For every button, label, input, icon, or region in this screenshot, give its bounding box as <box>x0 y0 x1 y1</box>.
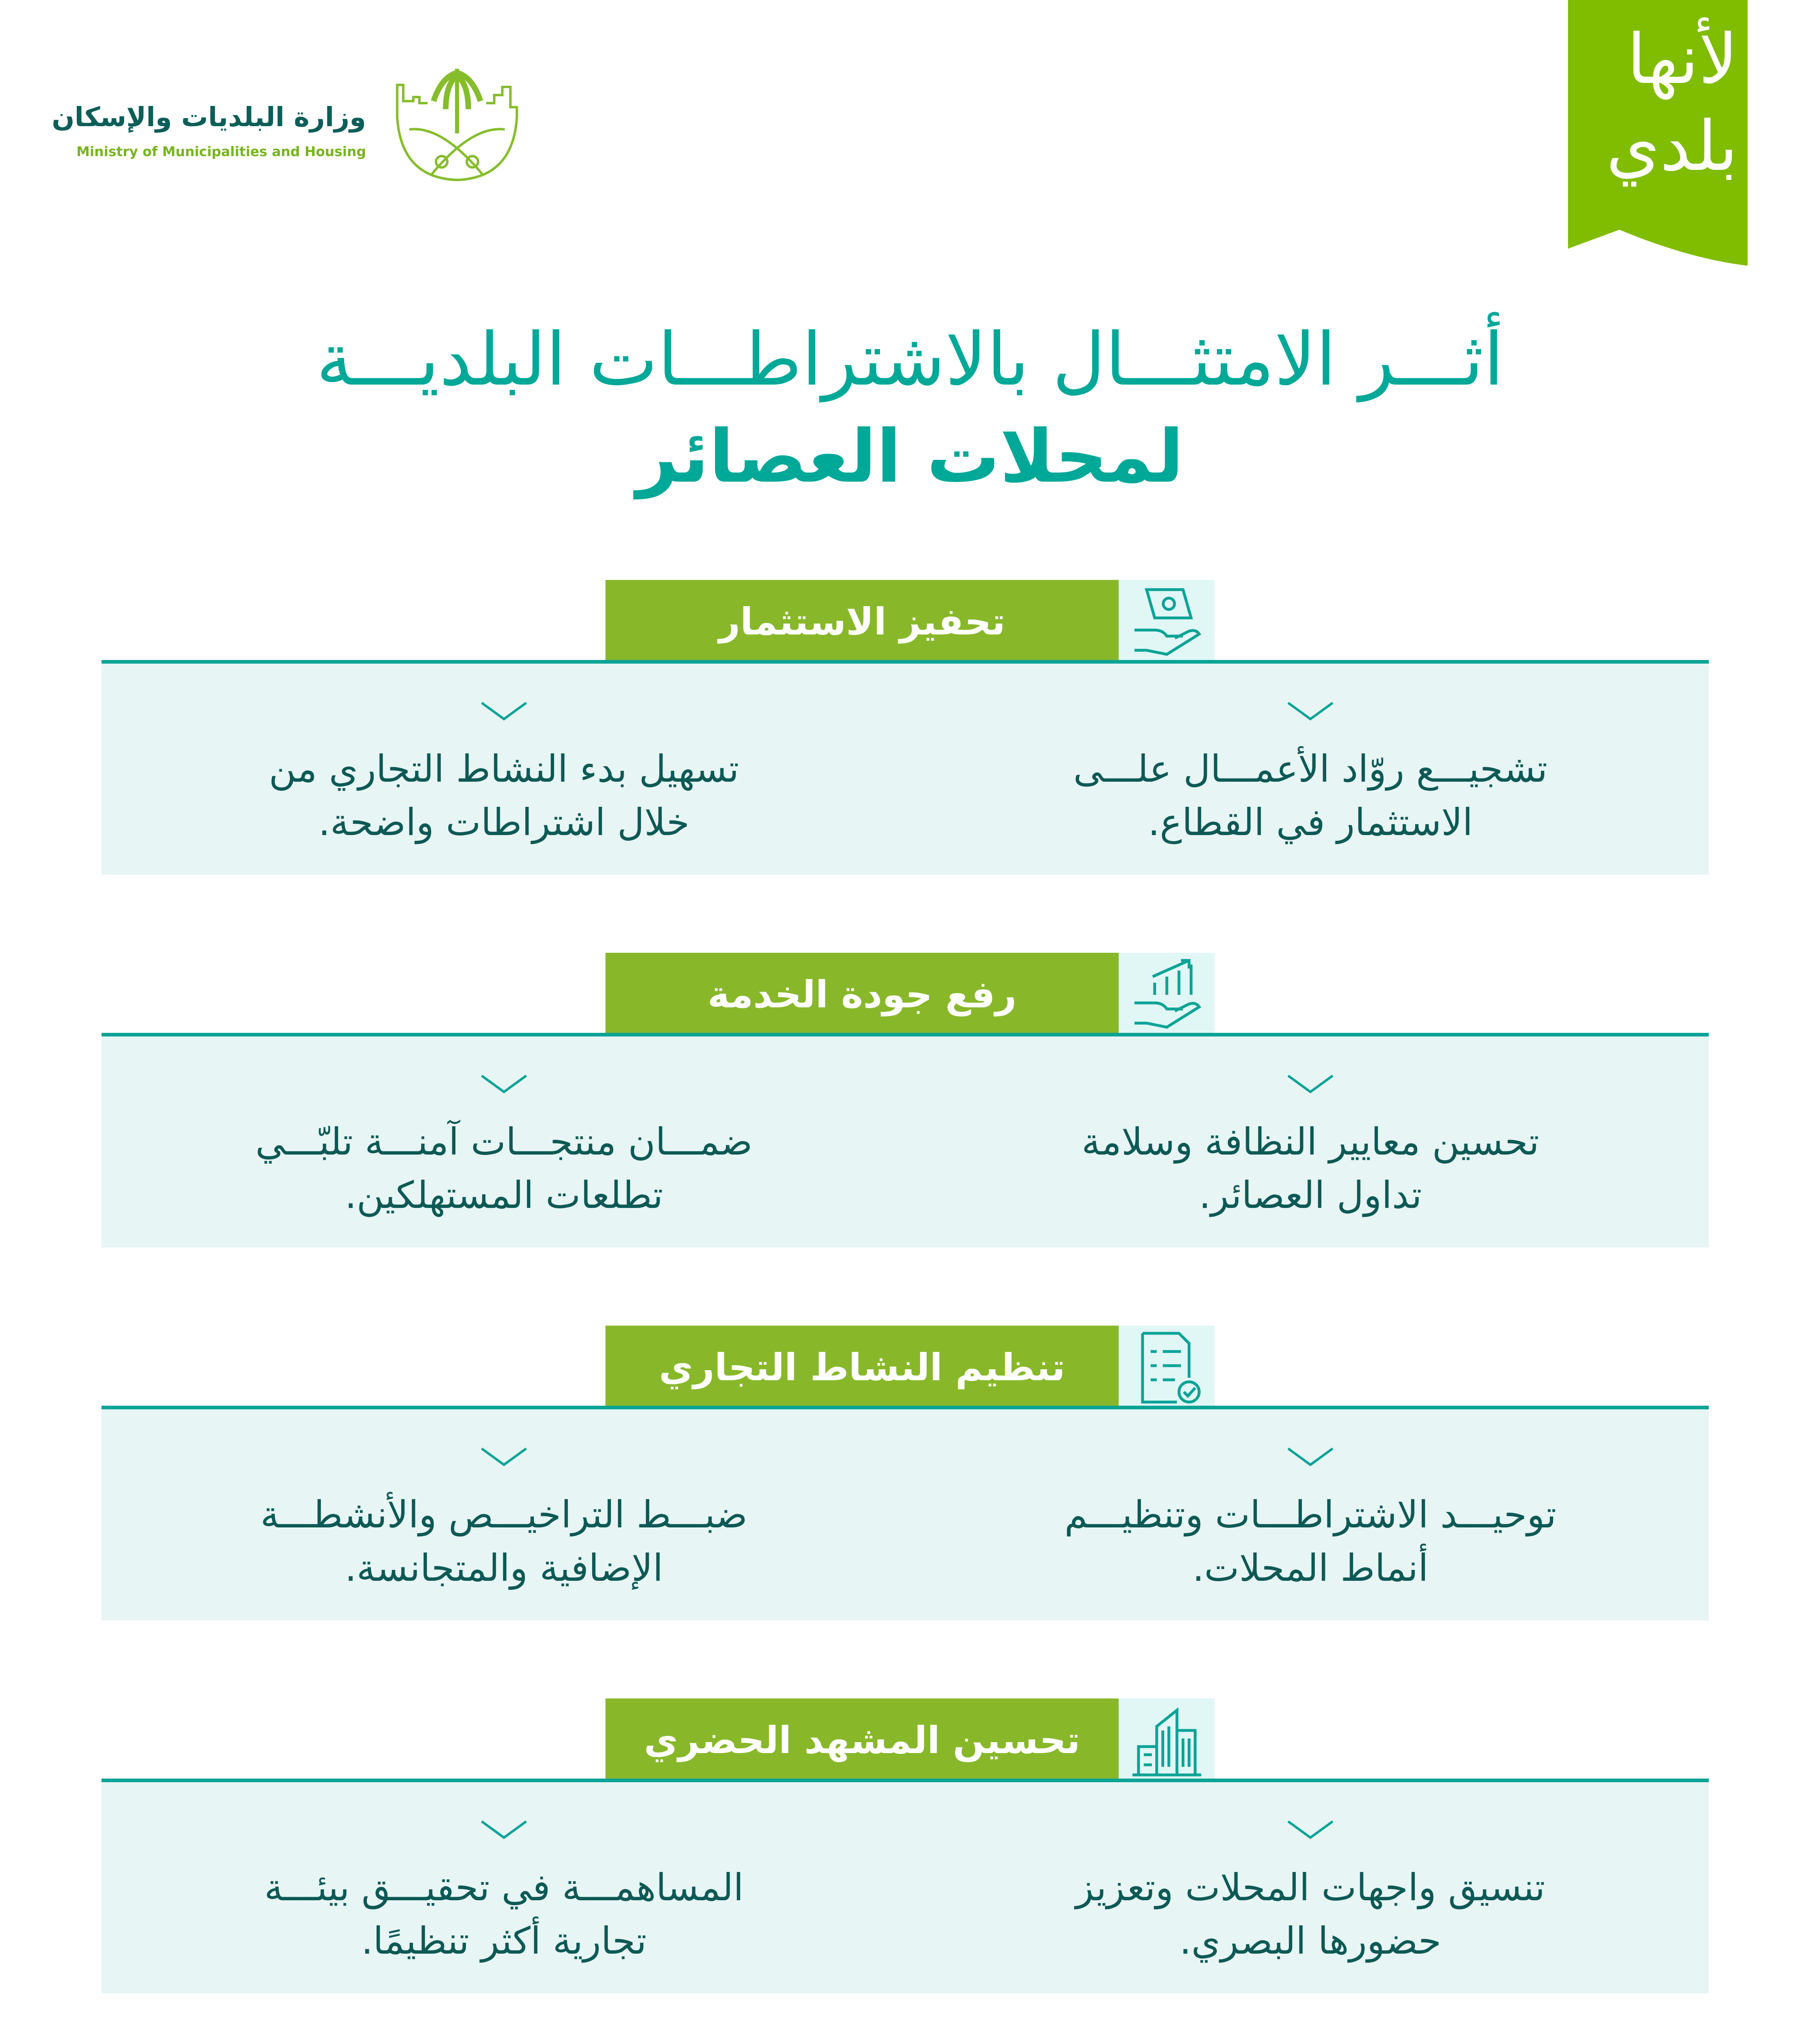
content box <box>102 1779 1709 1993</box>
ribbon: brand tag: بلدي <box>1606 106 1738 186</box>
title: أثـــر الامتثـــال بالاشتراطـــات البلديـــة <box>316 317 1504 402</box>
content box <box>102 1033 1709 1248</box>
ribbon: brand tag <box>1568 0 1748 267</box>
item: left: تسهيل بدء النشاط التجاري من <box>269 747 739 791</box>
section heading: تنظيم النشاط التجاري <box>659 1346 1065 1389</box>
item: left: ضبـــط التراخيـــص والأنشطـــة <box>260 1493 747 1536</box>
section heading <box>605 580 1119 664</box>
content box <box>102 660 1709 875</box>
section heading <box>605 1326 1119 1409</box>
panel: section 4 (urban landscape) <box>102 1677 1709 1996</box>
item: left <box>140 1036 868 1239</box>
section heading: رفع جودة الخدمة <box>708 973 1016 1016</box>
item: right <box>946 1409 1674 1612</box>
title: لمحلات العصائر <box>636 415 1184 499</box>
item: left <box>140 664 868 866</box>
item: right <box>946 1782 1674 1984</box>
ribbon: brand tag: لأنها <box>1627 19 1738 99</box>
section heading <box>605 1698 1119 1782</box>
icon: checklist <box>1119 1326 1215 1409</box>
item: left: تجارية أكثر تنظيمًا. <box>361 1919 647 1963</box>
section heading: تحفيز الاستثمار <box>719 600 1005 643</box>
icon: money hand <box>1119 580 1215 664</box>
panel: section 2 (service quality) <box>102 931 1709 1250</box>
panel: section 1 (investment) <box>102 558 1709 878</box>
logo: ministry name <box>71 99 366 168</box>
item: left: الإضافية والمتجانسة. <box>345 1546 663 1590</box>
icon: growth hand <box>1119 953 1215 1036</box>
icon: ministry emblem <box>389 57 525 182</box>
item: right: تشجيـــع روّاد الأعمـــال علـــى <box>1073 747 1547 791</box>
item: right: تداول العصائر. <box>1199 1174 1422 1217</box>
icon: buildings <box>1119 1698 1215 1782</box>
item: right: الاستثمار في القطاع. <box>1148 801 1473 844</box>
logo: ministry name: وزارة البلديات والإسكان <box>52 102 366 133</box>
item: left: خلال اشتراطات واضحة. <box>318 801 690 844</box>
item: left <box>140 1782 868 1984</box>
item: left <box>140 1409 868 1612</box>
content box <box>102 1406 1709 1620</box>
item: right <box>946 664 1674 866</box>
item: right <box>946 1036 1674 1239</box>
section heading <box>605 953 1119 1036</box>
item: right: أنماط المحلات. <box>1192 1546 1428 1590</box>
logo: ministry name: Ministry of Municipalities and Housing <box>76 144 366 159</box>
title <box>0 311 1820 514</box>
item: right: حضورها البصري. <box>1179 1919 1441 1963</box>
item: left: تطلعات المستهلكين. <box>345 1174 663 1217</box>
item: right: توحيـــد الاشتراطـــات وتنظيـــم <box>1064 1493 1556 1536</box>
item: right: تنسيق واجهات المحلات وتعزيز <box>1076 1866 1545 1909</box>
item: right: تحسين معايير النظافة وسلامة <box>1081 1120 1539 1163</box>
panel: section 3 (regulating activity) <box>102 1304 1709 1623</box>
item: left: ضمـــان منتجـــات آمنـــة تلبّـــي <box>255 1120 753 1163</box>
section heading: تحسين المشهد الحضري <box>644 1719 1080 1762</box>
item: left: المساهمـــة في تحقيـــق بيئـــة <box>264 1866 744 1909</box>
